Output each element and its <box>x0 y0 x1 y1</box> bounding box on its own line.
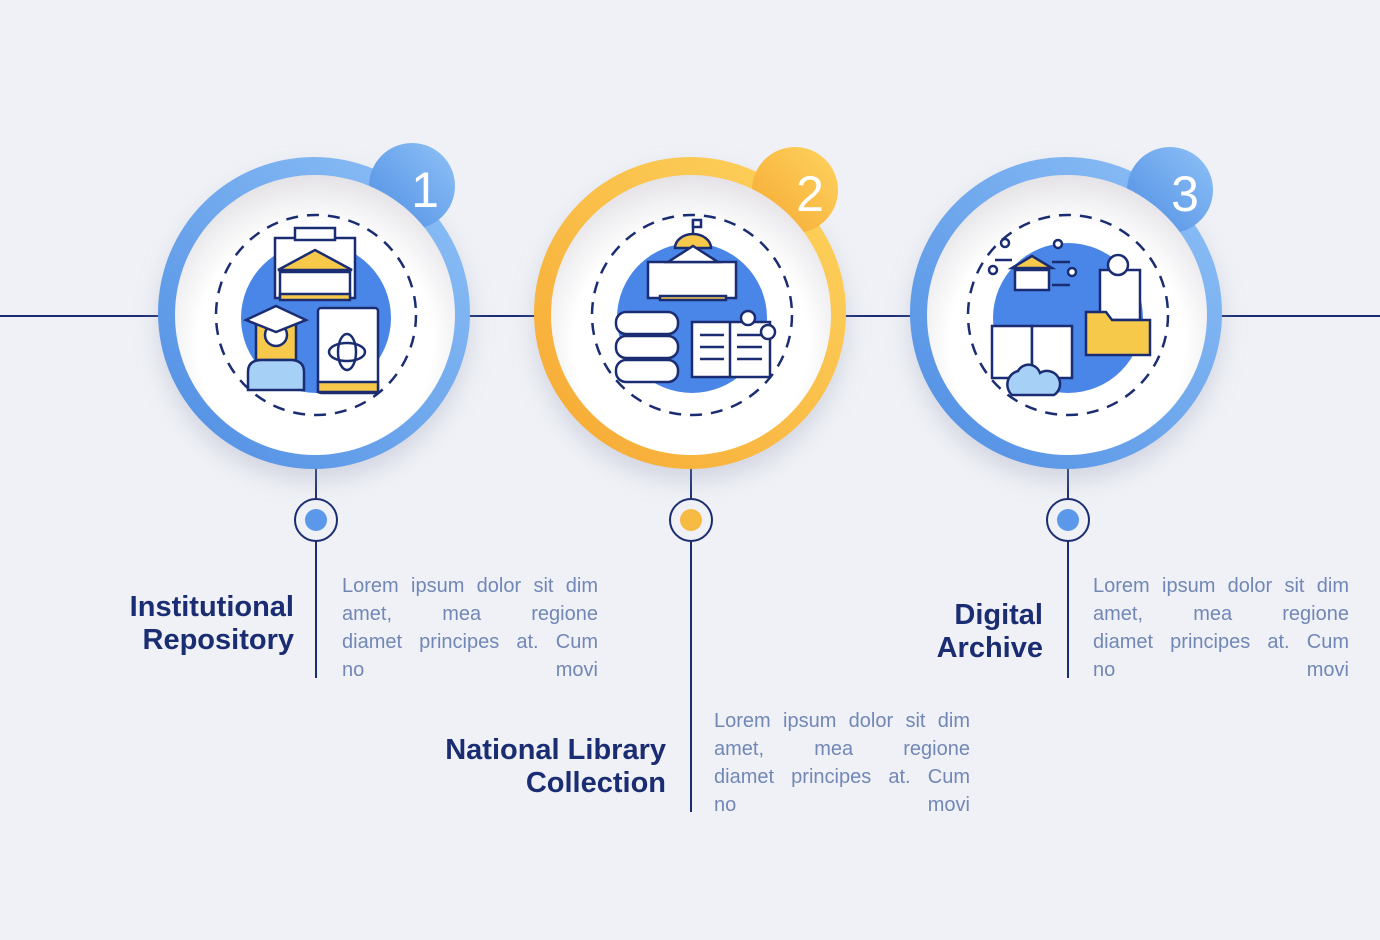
title: Digital Archive: Digital <box>954 599 1043 631</box>
text block 2: amet, mea regione <box>714 738 970 760</box>
text block 2: Lorem ipsum dolor sit dim <box>714 710 970 732</box>
text block 2: diamet principes at. Cum <box>714 766 970 788</box>
circle 2 <box>534 147 846 469</box>
circle 3 <box>910 147 1222 469</box>
text block 1: Lorem ipsum dolor sit dim <box>342 575 598 597</box>
text block 1: amet, mea regione <box>342 603 598 625</box>
badge 3 <box>1127 147 1213 233</box>
text block 3: amet, mea regione <box>1093 603 1349 625</box>
title: Digital Archive: Archive <box>937 632 1043 664</box>
icon: university/graduate/book <box>246 228 378 393</box>
text block 3: no movi <box>1093 659 1349 681</box>
badge 2: 2 <box>796 166 824 222</box>
node markers <box>295 499 1089 541</box>
title: Institutional Repository: Institutional <box>130 591 294 623</box>
title: National Library Collection: National Library <box>445 734 666 766</box>
text block 1 <box>342 575 598 681</box>
text block 3 <box>1093 575 1349 681</box>
connectors <box>316 460 1068 812</box>
title: National Library Collection: Collection <box>526 767 666 799</box>
badge 2 <box>752 147 838 233</box>
text block 3: Lorem ipsum dolor sit dim <box>1093 575 1349 597</box>
timeline line <box>0 315 1380 317</box>
badge 3: 3 <box>1171 166 1199 222</box>
text block 1: diamet principes at. Cum <box>342 631 598 653</box>
title: Digital Archive <box>937 599 1043 664</box>
text block 2: no movi <box>714 794 970 816</box>
text block 3: diamet principes at. Cum <box>1093 631 1349 653</box>
icon: digital archive <box>989 239 1150 395</box>
title: Institutional Repository <box>130 591 294 656</box>
title: National Library Collection <box>445 734 666 799</box>
badge 1: 1 <box>411 162 439 218</box>
badge 1 <box>369 143 455 229</box>
title: Institutional Repository: Repository <box>143 624 294 656</box>
text block 2 <box>714 710 970 816</box>
circle 1 <box>158 143 470 469</box>
text block 1: no movi <box>342 659 598 681</box>
icon: library/books <box>616 220 775 382</box>
